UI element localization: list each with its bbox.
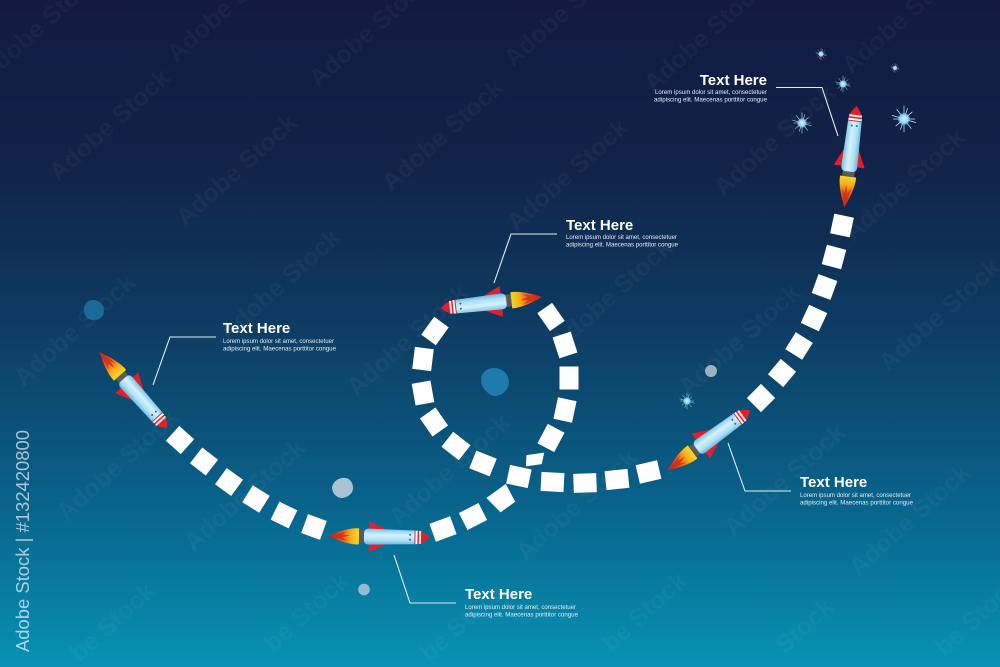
callout: bottom: Text Here — [465, 586, 532, 603]
rocket: bottom — [328, 520, 430, 553]
stars — [680, 48, 916, 409]
callout: left: Text Here — [223, 320, 290, 337]
callout: bottom — [394, 555, 579, 618]
callout: top: Lorem ipsum dolor sit amet, consectetuer — [655, 90, 767, 96]
planets — [84, 300, 717, 595]
callout: left: adipiscing elit. Maecenas porttitor congue — [223, 346, 337, 352]
watermark pattern: Adobe Stock — [839, 123, 971, 247]
callout: right: Text Here — [800, 474, 867, 491]
dashed flight path — [166, 214, 854, 542]
rocket: loop — [439, 281, 544, 324]
watermark pattern: Adobe Stock — [511, 443, 643, 567]
callout: loop: Text Here — [566, 217, 633, 234]
callout: right: adipiscing elit. Maecenas porttitor congue — [800, 500, 914, 506]
watermark pattern: be Stock — [259, 567, 355, 657]
watermark pattern: Adobe Stock — [377, 73, 509, 197]
callout: left — [153, 320, 337, 385]
rocket: right — [658, 398, 759, 483]
callout: top: Text Here — [700, 72, 767, 89]
watermark pattern: Adobe Stock — [709, 78, 841, 202]
watermark pattern: Stock — [770, 593, 839, 659]
rocket: left — [88, 342, 179, 439]
callout: bottom: adipiscing elit. Maecenas porttitor congue — [465, 612, 579, 618]
callout: left: Lorem ipsum dolor sit amet, consectetuer — [223, 339, 334, 345]
callout: bottom: Lorem ipsum dolor sit amet, consectetuer — [465, 605, 576, 611]
callout: top: adipiscing elit. Maecenas porttitor congue — [654, 98, 768, 104]
watermark pattern: Adobe Stock — [171, 108, 303, 232]
watermark pattern: Adobe Stock — [546, 233, 678, 357]
watermark pattern: be Stock — [65, 577, 161, 667]
stock id sidebar text: Adobe Stock | #132420800 — [13, 430, 33, 652]
callout: loop — [494, 217, 679, 283]
watermark pattern: Adobe Stock — [674, 278, 806, 402]
callout: loop: Lorem ipsum dolor sit amet, consectetuer — [566, 235, 677, 241]
watermark pattern: Adobe Stock — [342, 278, 474, 402]
watermark pattern: Adobe Stock — [214, 223, 346, 347]
watermark pattern: Adobe Stock — [719, 418, 851, 542]
callout: loop: adipiscing elit. Maecenas porttitor congue — [566, 242, 679, 248]
callout: right — [728, 443, 914, 506]
callout: top — [654, 72, 838, 136]
watermark pattern: be Stock — [415, 577, 511, 667]
watermark pattern: Adobe Stock — [844, 458, 976, 582]
watermark pattern: Adobe Stock — [502, 113, 634, 237]
rocket: top — [829, 104, 872, 209]
callout: right: Lorem ipsum dolor sit amet, consectetuer — [800, 493, 911, 499]
watermark pattern: Adobe Stock — [384, 408, 516, 532]
watermark pattern: Adobe Stock — [179, 433, 311, 557]
watermark pattern: Adobe Stock — [52, 403, 184, 527]
watermark pattern: Adobe Stock — [9, 268, 141, 392]
watermark pattern: be Stock — [597, 567, 693, 657]
watermark pattern: Adobe Stock — [44, 63, 176, 187]
